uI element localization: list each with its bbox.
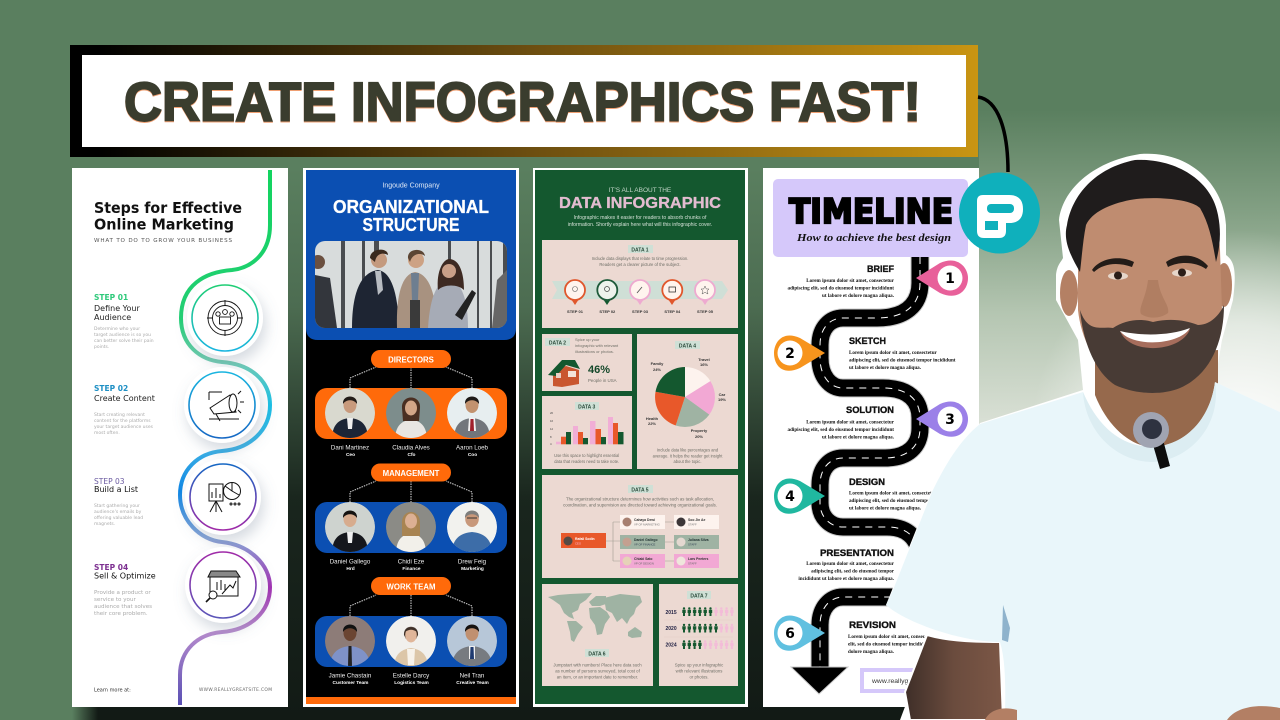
pin: 1: 1 xyxy=(945,271,955,287)
section: directors: DIRECTORS xyxy=(388,356,434,364)
step 02: Create Content xyxy=(94,394,155,403)
data 6: world map: an item, or an important date to remember. xyxy=(557,674,638,680)
data 2: house stat: illustrations or photos. xyxy=(575,349,614,354)
shirt side shadow xyxy=(1002,605,1010,642)
node: root: Rafali Sodin xyxy=(575,537,595,541)
step: brief: ut labore et dolore magna aliqua. xyxy=(822,293,895,299)
step 02 xyxy=(94,367,260,443)
pin: 6 xyxy=(774,616,825,651)
pin: 2: 2 xyxy=(785,346,795,362)
pin: 1 xyxy=(916,261,968,296)
background: glow behind presenter xyxy=(979,150,1280,720)
map xyxy=(548,593,642,642)
section: work team xyxy=(315,577,507,686)
step: brief: adipiscing elit, sed do eiusmod tempor incididunt xyxy=(788,286,894,292)
step 01: Audience xyxy=(94,313,131,322)
timeline header box xyxy=(773,179,968,257)
step 04: their core problem. xyxy=(94,611,148,617)
names: work team xyxy=(329,672,489,686)
pin: 3: 3 xyxy=(945,412,955,428)
icon: brand logo xyxy=(959,172,1040,254)
panel heading: WHAT TO DO TO GROW YOUR BUSINESS xyxy=(94,238,232,244)
panel: steps for effective online marketing xyxy=(72,168,288,707)
presenter photo xyxy=(886,154,1280,720)
names: work team: Customer Team xyxy=(333,680,368,686)
data 6: world map: Jumpstart with numbers! Place here data such xyxy=(553,662,642,668)
background: lit area at right xyxy=(979,0,1280,720)
names: directors: Coo xyxy=(468,452,477,458)
node: row 1: VP OF MARKETING xyxy=(634,522,660,526)
step: sketch xyxy=(849,336,956,371)
data 1: steps ribbon: STEP 04 xyxy=(664,309,681,314)
data 7: pictogram: with relevant illustrations xyxy=(676,668,722,674)
names: directors: Dani Martinez xyxy=(331,444,369,452)
step 01: Define Your xyxy=(94,304,140,313)
step 03: Build a List xyxy=(94,485,138,494)
step 03: audience's emails by xyxy=(94,509,142,515)
names: management: Chidi Eze xyxy=(398,558,425,566)
footer website: WWW.REALLYGREATSITE.COM xyxy=(199,687,272,693)
names: work team: Jamie Chastain xyxy=(329,672,372,680)
data 5: org chart xyxy=(542,475,738,578)
step: solution: Lorem ipsum dolor sit amet, consectetur xyxy=(806,420,895,426)
website box: www.reallygreatsite.com xyxy=(871,678,946,685)
data 1: steps ribbon: STEP 01 xyxy=(567,309,584,314)
names: directors: Claudia Alves xyxy=(392,444,430,452)
data 3: bar chart: 4 xyxy=(550,442,552,446)
step: design: adipiscing elit, sed do eiusmod tempor xyxy=(849,498,933,504)
step 01: target audience is so you xyxy=(94,332,151,338)
step: solution: adipiscing elit, sed do eiusmod tempor incididunt xyxy=(788,427,894,433)
data 3: bar chart: 8 xyxy=(550,435,552,439)
data panel heading xyxy=(559,187,721,228)
data panel heading: DATA INFOGRAPHIC xyxy=(559,195,721,212)
node: row 2: Juliana Silva xyxy=(688,538,709,542)
data panel heading: information. Shortly explain here what will this infographic cover. xyxy=(568,222,712,228)
data 2: house stat: People in USA xyxy=(588,378,617,383)
data 4: pie chart: Include data like percentages and xyxy=(657,448,719,452)
step 03: offering valuable lead xyxy=(94,515,143,521)
pin: step 01 xyxy=(565,280,585,305)
step 04: audience that solves xyxy=(94,604,152,610)
pin: 4: 4 xyxy=(785,489,795,505)
data 3: bar chart: 16 xyxy=(550,419,554,423)
data 3: bar chart: DATA 3 xyxy=(578,404,595,410)
data 1: steps ribbon xyxy=(542,240,738,328)
data 2: house stat: infographic with relevant xyxy=(575,343,619,348)
step: revision xyxy=(848,620,937,655)
step 01 xyxy=(94,280,263,356)
data 1: steps ribbon: STEP 03 xyxy=(632,309,649,314)
data 6: world map: DATA 6 xyxy=(588,651,606,657)
background: shadow fade at lower left xyxy=(72,707,98,720)
data 4: pie chart xyxy=(637,334,738,469)
node: row 1: Soo Jin Ae xyxy=(688,518,706,522)
panel heading: Online Marketing xyxy=(94,216,234,234)
pin: 2 xyxy=(774,336,825,371)
forearm xyxy=(905,635,1003,720)
data 2: house stat xyxy=(542,334,632,391)
nose xyxy=(1140,280,1168,318)
header banner xyxy=(70,45,978,157)
data 4: pie chart: 22% xyxy=(648,421,656,426)
step: sketch: SKETCH xyxy=(849,336,886,347)
org title xyxy=(333,197,489,235)
step: solution: SOLUTION xyxy=(846,405,894,416)
footer note: Learn more at: xyxy=(94,688,131,694)
names: management: Daniel Gallego xyxy=(330,558,371,566)
panel: timeline xyxy=(763,168,979,707)
data 1: steps ribbon: Include data displays that relate to time progression. xyxy=(592,256,688,261)
step: brief xyxy=(788,264,895,299)
step 03: magnets. xyxy=(94,521,115,527)
panel heading xyxy=(94,199,242,244)
step flow line xyxy=(180,170,270,705)
data 2: house stat: Spice up your xyxy=(575,337,600,342)
names: management: Finance xyxy=(402,566,421,572)
step 02: Start creating relevant xyxy=(94,412,145,418)
pin: 3 xyxy=(916,402,968,437)
section: management: MANAGEMENT xyxy=(383,469,440,478)
node: row 1 xyxy=(620,515,719,529)
hair xyxy=(1066,160,1220,272)
step 03: Start gathering your xyxy=(94,503,140,509)
data 7: pictogram: 2015 xyxy=(666,610,677,616)
data 4: pie chart: 20% xyxy=(695,434,703,439)
timeline header box: How to achieve the best design xyxy=(796,232,951,244)
node: row 2: STAFF xyxy=(688,542,697,546)
portrait: Neil Tran xyxy=(447,616,497,668)
step 02: most often. xyxy=(94,430,120,436)
title: CREATE INFOGRAPHICS FAST! xyxy=(124,70,921,132)
step 01: Determine who your xyxy=(94,326,140,332)
step: brief: BRIEF xyxy=(867,264,894,275)
icon: house xyxy=(548,360,580,387)
website box xyxy=(862,670,946,691)
step: brief: Lorem ipsum dolor sit amet, consectetur xyxy=(806,278,895,284)
data 3: bar chart: 20 xyxy=(550,411,554,415)
company label: Ingoude Company xyxy=(382,182,440,190)
pin: step 04 xyxy=(662,280,682,305)
node: root: CEO xyxy=(575,542,582,546)
eyes xyxy=(1108,268,1192,280)
node: row 1: Cahaya Dewi xyxy=(634,518,655,522)
data 4: pie chart: average. It helps the reader get insight xyxy=(653,453,723,458)
hand right xyxy=(1227,706,1280,720)
names: directors: Aaron Loeb xyxy=(456,444,489,452)
panel: data infographic xyxy=(533,168,748,707)
team photo xyxy=(311,241,507,328)
section: directors xyxy=(315,350,507,458)
step 04: Sell & Optimize xyxy=(94,572,156,580)
names: directors xyxy=(331,444,489,458)
step 02: your target audience uses xyxy=(94,424,154,430)
step: presentation xyxy=(798,548,895,582)
data 7: pictogram: Spice up your infographic xyxy=(675,662,724,668)
org title: ORGANIZATIONAL xyxy=(333,197,489,217)
data 3: bar chart xyxy=(542,396,632,469)
step 01: can better solve their pain xyxy=(94,338,154,344)
node: root xyxy=(561,533,606,548)
step: sketch: ut labore et dolore magna aliqua. xyxy=(849,365,922,371)
data 5: org chart: coordination, and supervision are directed toward achieving organizational goals. xyxy=(563,502,717,508)
data 3: bar chart: 12 xyxy=(550,427,554,431)
data 5: org chart: DATA 5 xyxy=(631,487,649,493)
data 4: pie chart: 19% xyxy=(718,397,726,402)
portrait: Daniel Gallego xyxy=(325,502,375,554)
names: work team: Estelle Darcy xyxy=(393,672,430,680)
pin: step 02 xyxy=(597,280,617,305)
node: row 3: Chiaki Sato xyxy=(634,557,652,561)
portrait: Estelle Darcy xyxy=(386,616,436,668)
portrait: Jamie Chastain xyxy=(325,616,375,668)
names: management: Drew Feig xyxy=(458,558,487,566)
data 4: pie chart: DATA 4 xyxy=(679,343,696,349)
node: row 3 xyxy=(620,554,719,568)
step: revision: dolore magna aliqua. xyxy=(848,649,895,655)
connector: black curve to logo xyxy=(978,97,1008,172)
data 4: pie chart: about the topic. xyxy=(674,459,702,464)
portrait: Chidi Eze xyxy=(386,502,436,554)
hand left xyxy=(985,708,1017,720)
step: presentation: adipiscing elit, sed do eiusmod tempor xyxy=(811,568,895,574)
step: presentation: Lorem ipsum dolor sit amet, consectetur xyxy=(806,561,895,567)
section: management xyxy=(315,464,507,572)
data 1: steps ribbon: DATA 1 xyxy=(631,247,649,253)
background: dark shadow behind panels xyxy=(72,168,979,720)
step 04: service to your xyxy=(94,597,136,603)
node: row 2: VP OF FINANCE xyxy=(634,542,656,546)
org title: STRUCTURE xyxy=(362,215,460,235)
names: work team: Neil Tran xyxy=(460,672,485,680)
names: directors: Ceo xyxy=(346,452,355,458)
ears xyxy=(1060,263,1232,316)
lapel mic xyxy=(1133,412,1170,469)
road xyxy=(820,257,922,680)
t-shirt xyxy=(886,382,1280,720)
smile xyxy=(1120,328,1190,342)
names: directors: Cfo xyxy=(408,452,416,458)
portrait: Dani Martinez xyxy=(325,388,375,440)
step 04: STEP 04 xyxy=(94,563,128,572)
data 3: bar chart: data that readers need to take note. xyxy=(554,459,619,464)
data 2: house stat: 46% xyxy=(588,364,610,376)
step: design: DESIGN xyxy=(849,477,885,488)
data 5: org chart: The organizational structure determines how activities such as task allocation, xyxy=(566,496,714,502)
node: row 3: STAFF xyxy=(688,562,697,566)
data 7: pictogram xyxy=(659,584,738,686)
step: presentation: incididunt ut labore et dolore magna aliqua. xyxy=(798,576,895,582)
beard xyxy=(1080,305,1224,393)
face xyxy=(1078,185,1222,393)
data 1: steps ribbon: STEP 05 xyxy=(697,309,714,314)
step 02: STEP 02 xyxy=(94,384,128,393)
white cutout outline xyxy=(886,154,1280,720)
portrait: Drew Feig xyxy=(447,502,497,554)
data 3: bar chart: Use this space to highlight essential xyxy=(554,453,619,458)
step: revision: REVISION xyxy=(849,620,896,631)
portrait: Aaron Loeb xyxy=(447,388,497,440)
step: design: ut labore et dolore magna aliqua. xyxy=(849,506,922,512)
data 1: steps ribbon: STEP 02 xyxy=(599,309,616,314)
data 4: pie chart: Family xyxy=(651,361,664,366)
step: revision: Lorem ipsum dolor sit amet, consectetur xyxy=(848,634,937,640)
step: design: Lorem ipsum dolor sit amet, consectetur xyxy=(849,490,938,496)
step 03 xyxy=(94,459,261,535)
node: row 2: Daniel Gallego xyxy=(634,538,658,542)
data panel heading: Infographic makes it easier for readers to absorb chunks of xyxy=(574,215,707,221)
timeline header box: TIMELINE xyxy=(789,192,953,231)
data 4: pie chart: Travel xyxy=(698,357,710,362)
step 02: content for the platforms xyxy=(94,418,151,424)
names: management: Hrd xyxy=(346,566,355,572)
names: work team: Logistics Team xyxy=(394,680,429,686)
step 04: Provide a product or xyxy=(94,590,151,596)
data 4: pie chart: Car xyxy=(719,392,726,397)
section: work team: WORK TEAM xyxy=(387,582,435,592)
step 01: STEP 01 xyxy=(94,293,128,302)
step 03: STEP 03 xyxy=(94,477,125,486)
node: row 3: VP OF DESIGN xyxy=(634,562,654,566)
step 04 xyxy=(94,547,261,623)
panel heading: Steps for Effective xyxy=(94,199,242,217)
names: work team: Creative Team xyxy=(456,680,489,686)
step: solution xyxy=(788,405,895,440)
panel: organizational structure xyxy=(303,168,519,707)
data 4: pie chart: Health xyxy=(646,416,659,421)
data 4: pie chart: 24% xyxy=(653,367,661,372)
data 7: pictogram: 2024 xyxy=(666,642,677,648)
data 2: house stat: DATA 2 xyxy=(549,340,566,346)
node: row 3: Lars Peeters xyxy=(688,557,708,561)
data 6: world map: as number of persons surveyed, total cost of xyxy=(555,668,641,674)
pin: 6: 6 xyxy=(785,626,795,642)
data 1: steps ribbon: Readers get a clearer picture of the subject. xyxy=(599,262,681,267)
data 7: pictogram: 2020 xyxy=(666,626,677,632)
step: solution: ut labore et dolore magna aliqua. xyxy=(822,434,895,440)
data 6: world map xyxy=(542,584,653,686)
data 7: pictogram: or photos. xyxy=(689,674,709,680)
step: presentation: PRESENTATION xyxy=(820,548,894,559)
pin: step 03 xyxy=(630,280,650,305)
pin: 4 xyxy=(774,479,825,514)
node: row 2 xyxy=(620,535,719,549)
lip and teeth xyxy=(1120,329,1190,348)
neck xyxy=(1095,350,1218,447)
step: revision: elit, sed do eiusmod tempor incididunt xyxy=(848,642,931,648)
data 4: pie chart: Property xyxy=(691,428,708,433)
step: sketch: Lorem ipsum dolor sit amet, consectetur xyxy=(849,350,938,356)
step: sketch: adipiscing elit, sed do eiusmod tempor incididunt xyxy=(849,358,956,364)
eyebrows xyxy=(1092,256,1208,272)
shirt collar xyxy=(1083,382,1216,462)
road arrowhead xyxy=(791,667,848,694)
names: management: Marketing xyxy=(461,566,484,572)
step 01: points. xyxy=(94,344,109,350)
node: row 1: STAFF xyxy=(688,522,697,526)
pin: step 05 xyxy=(695,280,715,305)
data 4: pie chart: 16% xyxy=(700,362,708,367)
data 7: pictogram: DATA 7 xyxy=(690,593,708,599)
step: design xyxy=(849,477,938,512)
portrait: Claudia Alves xyxy=(386,388,436,440)
data panel heading: IT'S ALL ABOUT THE xyxy=(609,187,672,194)
names: management xyxy=(330,558,487,572)
